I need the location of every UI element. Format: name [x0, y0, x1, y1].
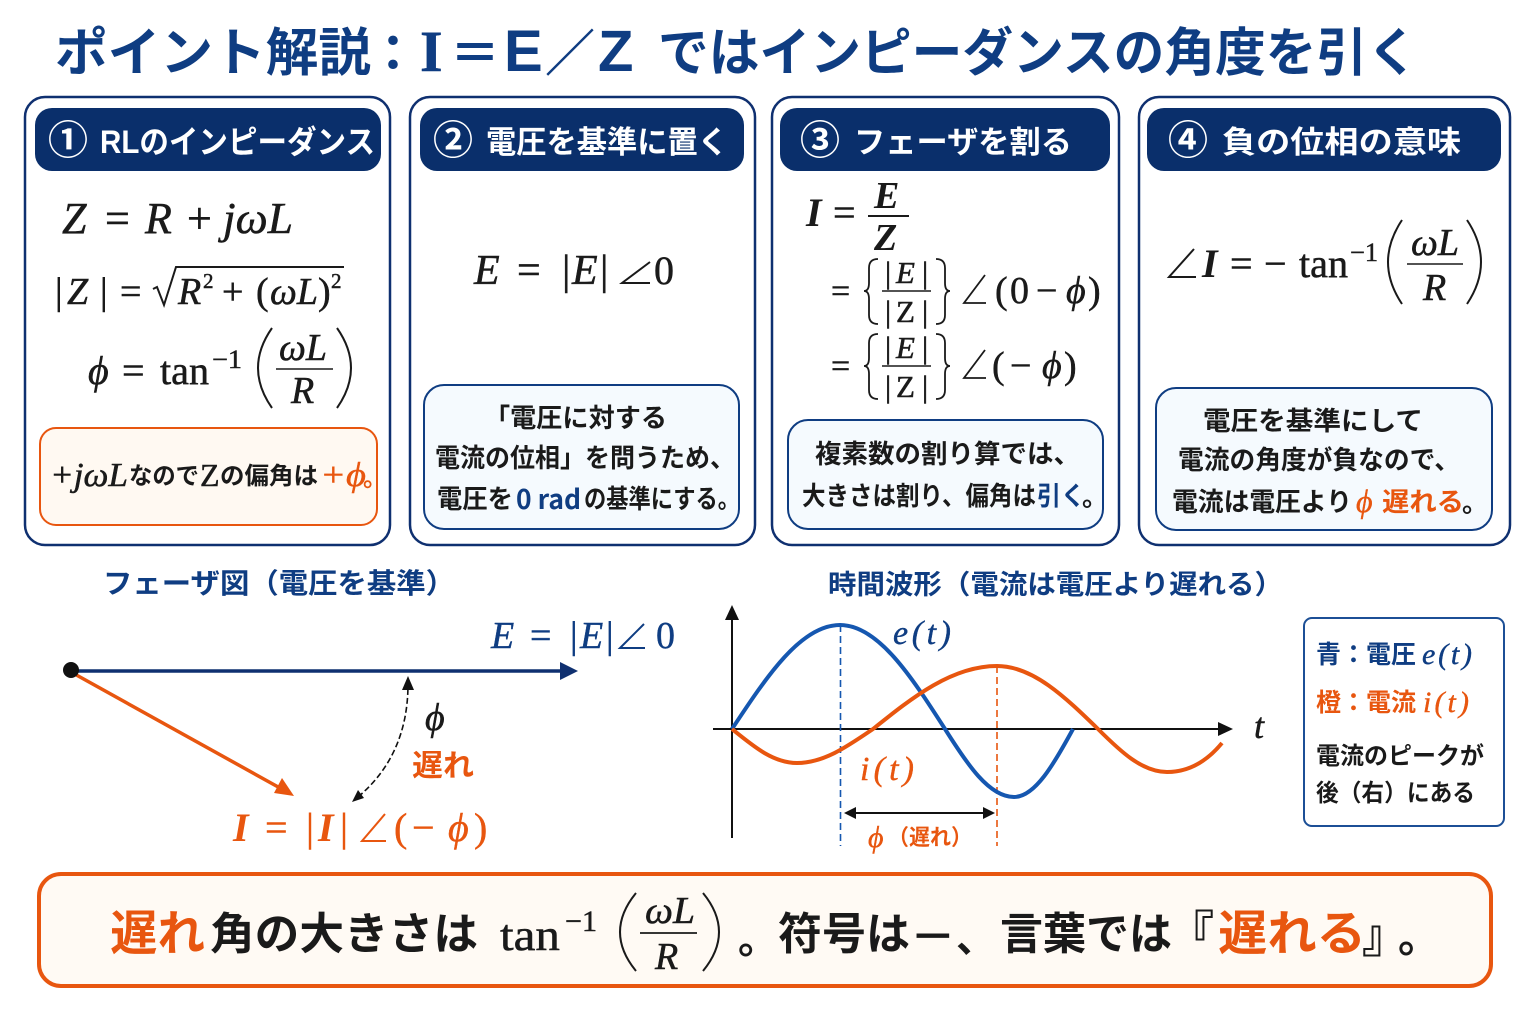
formula line 2: |	[922, 255, 928, 290]
negative phase formula: −	[1264, 241, 1287, 286]
formula line 2: |	[885, 255, 891, 290]
formula line 2: =	[831, 273, 850, 310]
callout: positive angle: 。	[363, 465, 387, 492]
title	[55, 11, 1418, 86]
callout: current lags: 。	[1462, 488, 1488, 518]
voltage phasor label: 0	[656, 615, 675, 657]
phasor diagram	[63, 568, 675, 850]
formula line 2: E	[895, 255, 915, 290]
magnitude formula: (	[256, 271, 269, 313]
impedance formula	[62, 194, 293, 243]
bottom summary banner: 』	[1362, 910, 1408, 962]
panel: 電圧を基準に置く	[410, 97, 755, 545]
title: ／	[545, 14, 595, 86]
callout: voltage reference	[424, 385, 740, 529]
callout: complex division: 大きさは割り、偏角は	[802, 481, 1036, 511]
callout: current lags	[1156, 388, 1492, 530]
panel 1 heading	[35, 108, 381, 171]
bottom summary banner: −	[914, 914, 952, 958]
formula line 2: )	[1088, 270, 1101, 312]
callout: voltage reference: 0 rad	[516, 478, 581, 517]
title: ではインピーダンスの角度を引く	[658, 11, 1418, 86]
legend note: 後（右）にある	[1316, 780, 1475, 807]
current phasor label: |	[306, 805, 314, 850]
panel: 負の位相の意味	[1139, 97, 1510, 545]
callout: complex division: 複素数の割り算では、	[815, 439, 1080, 469]
phasor heading: フェーザ図（電圧を基準）	[103, 568, 455, 599]
legend: current: i(t)	[1423, 686, 1469, 719]
peak guide lines	[840, 625, 997, 846]
callout: current lags: 電流の角度が負なので、	[1178, 445, 1460, 475]
magnitude formula: Z	[67, 271, 89, 313]
current fraction formula: =	[833, 190, 856, 235]
panel 2 heading	[420, 108, 744, 171]
panel 1 heading: RLのインピーダンス	[100, 124, 375, 160]
phase angle formula: −1	[212, 345, 242, 374]
lag arc arrow	[352, 676, 414, 802]
voltage label: e(t)	[893, 615, 951, 652]
voltage formula: |	[600, 248, 608, 294]
callout: current lags: 遅れる	[1382, 487, 1464, 517]
negative phase formula: R	[1422, 267, 1446, 309]
callout: complex division	[788, 420, 1108, 529]
voltage formula: |	[562, 248, 570, 294]
current phasor label: (	[394, 805, 407, 850]
title: ：	[368, 14, 418, 86]
bottom summary banner: ωL	[645, 890, 695, 932]
callout: voltage reference: 電流の位相」を問うため、	[435, 443, 735, 473]
panel 3 heading: フェーザを割る	[854, 125, 1072, 160]
panel 2 heading: ②	[433, 108, 473, 166]
voltage formula: E	[571, 248, 598, 294]
magnitude formula: |	[100, 271, 108, 313]
magnitude formula	[55, 267, 344, 313]
legend: voltage: 青：電圧	[1316, 641, 1416, 669]
panel 3 heading	[780, 108, 1110, 171]
voltage curve	[732, 625, 1073, 797]
impedance formula: R	[144, 194, 172, 243]
phase angle formula	[88, 327, 351, 412]
formula line 3: |	[885, 369, 891, 404]
phase angle formula: tan	[160, 348, 209, 393]
bottom summary banner: 言葉では	[1000, 910, 1172, 959]
magnitude formula: +	[222, 271, 243, 313]
bottom summary banner: 。	[1398, 914, 1440, 961]
magnitude formula: =	[120, 271, 141, 313]
impedance formula: +	[187, 194, 212, 243]
formula line 3: Z	[896, 369, 915, 404]
title: ポイント解説	[55, 11, 371, 86]
impedance formula: jωL	[218, 194, 293, 243]
panel 1 heading: ①	[48, 108, 88, 166]
callout: positive angle: +ϕ	[320, 457, 366, 494]
phase angle formula: ϕ	[88, 348, 109, 393]
current phasor label: I	[317, 805, 335, 850]
formula line 2: |	[885, 294, 891, 329]
title: ＝	[450, 14, 500, 86]
formula line 3: ϕ	[1042, 345, 1062, 387]
panel 3 heading: ③	[800, 108, 840, 166]
callout: voltage reference: 「電圧に対する	[484, 403, 667, 433]
formula line 3: )	[1064, 345, 1077, 387]
callout: complex division: 。	[1082, 482, 1108, 512]
callout: positive angle	[40, 428, 387, 525]
legend	[1304, 618, 1504, 826]
formula line 2: Z	[896, 294, 915, 329]
panel 4 heading	[1147, 108, 1501, 171]
panel 4 heading: ④	[1168, 108, 1208, 166]
title: Z	[598, 19, 633, 84]
formula line 2: 0	[1010, 270, 1029, 312]
negative phase formula	[1169, 220, 1481, 309]
formula line 2	[831, 255, 1101, 329]
bottom summary banner: R	[654, 936, 678, 978]
legend: current	[1316, 686, 1469, 719]
waveform chart	[713, 570, 1283, 854]
current fraction formula	[805, 175, 909, 259]
phase angle formula: =	[122, 348, 145, 393]
current phasor label	[232, 805, 487, 850]
negative phase formula: I	[1201, 241, 1219, 286]
current phasor label: −	[412, 805, 435, 850]
magnitude formula: 2	[203, 269, 214, 293]
axes: t	[1254, 706, 1265, 746]
title: E	[504, 19, 543, 84]
bottom summary banner: −1	[565, 905, 597, 938]
callout: current lags: ϕ	[1356, 483, 1373, 519]
voltage phasor label: E	[579, 615, 603, 657]
callout: complex division: 引く	[1037, 481, 1085, 511]
bottom summary banner: 。	[738, 918, 778, 962]
formula line 2: ϕ	[1066, 270, 1086, 312]
negative phase formula: =	[1230, 241, 1253, 286]
panel 2 heading: 電圧を基準に置く	[486, 125, 728, 160]
bottom summary banner: 遅れる	[1218, 908, 1366, 961]
callout: positive angle: Z	[200, 457, 220, 493]
voltage phasor label: |	[606, 615, 614, 657]
phi label: ϕ	[425, 697, 445, 739]
panel 4 heading: 負の位相の意味	[1222, 125, 1461, 160]
voltage phasor label: |	[570, 615, 578, 657]
formula line 2: |	[922, 294, 928, 329]
current phasor arrow	[71, 672, 294, 796]
bottom summary banner: tan	[500, 911, 560, 960]
bottom summary banner: 『	[1168, 907, 1214, 959]
impedance formula: Z	[62, 194, 87, 243]
legend note	[1316, 742, 1484, 807]
lag span label: ϕ	[868, 821, 884, 854]
callout: positive angle: なので	[129, 463, 199, 490]
legend: current: 橙：電流	[1316, 689, 1416, 717]
voltage formula: =	[517, 248, 541, 294]
panel: フェーザを割る	[772, 97, 1119, 545]
magnitude formula: 2	[331, 269, 342, 293]
current curve	[732, 666, 1222, 772]
current label: i(t)	[860, 751, 914, 788]
lag span label	[868, 821, 972, 854]
voltage formula: E	[473, 248, 500, 294]
formula line 2: −	[1036, 270, 1057, 312]
callout: positive angle: の偏角は	[220, 463, 318, 490]
legend: voltage: e(t)	[1422, 638, 1472, 671]
voltage phasor label: =	[530, 615, 551, 657]
phase angle formula: ωL	[279, 327, 327, 369]
bottom summary banner: 遅れ	[110, 908, 205, 961]
current phasor label: )	[474, 805, 487, 850]
axes	[713, 605, 1265, 838]
callout: voltage reference: の基準にする。	[584, 484, 740, 514]
lag label: 遅れ	[412, 750, 474, 783]
voltage phasor label	[490, 615, 675, 657]
lag span arrow	[844, 807, 995, 819]
bottom summary banner: 符号は	[778, 910, 910, 959]
magnitude formula: |	[55, 271, 63, 313]
lag span label: （遅れ）	[888, 825, 972, 850]
formula line 3: E	[895, 330, 915, 365]
current phasor label: =	[265, 805, 288, 850]
callout: voltage reference: 電圧を	[437, 484, 513, 514]
current phasor label: I	[232, 805, 250, 850]
formula line 3: |	[885, 330, 891, 365]
impedance formula: =	[105, 194, 130, 243]
voltage formula	[473, 248, 674, 294]
legend note: 電流のピークが	[1316, 742, 1484, 770]
magnitude formula: ωL	[270, 271, 318, 313]
voltage phasor label: E	[490, 615, 514, 657]
panel: RLのインピーダンス	[25, 97, 390, 545]
waveform heading: 時間波形（電流は電圧より遅れる）	[828, 570, 1283, 600]
phase angle formula: R	[290, 370, 314, 412]
current phasor label: |	[340, 805, 348, 850]
negative phase formula: −1	[1350, 238, 1378, 267]
legend: voltage	[1316, 638, 1472, 671]
callout: current lags: 電圧を基準にして	[1203, 406, 1423, 436]
formula line 2: (	[995, 270, 1008, 312]
negative phase formula: tan	[1299, 241, 1348, 286]
bottom summary banner: 角の大きさは	[210, 910, 478, 959]
bottom summary banner	[39, 874, 1491, 986]
title: I	[420, 19, 443, 84]
voltage formula: 0	[654, 248, 674, 293]
current fraction formula: I	[805, 190, 823, 235]
callout: positive angle: +jωL	[50, 457, 128, 494]
formula line 3: |	[922, 330, 928, 365]
current fraction formula: Z	[873, 217, 897, 259]
magnitude formula: R	[177, 271, 201, 313]
voltage phasor arrow	[71, 662, 578, 680]
negative phase formula: ωL	[1411, 222, 1459, 264]
formula line 3: (	[992, 345, 1005, 387]
formula line 3: −	[1010, 345, 1031, 387]
formula line 3: =	[831, 348, 850, 385]
origin dot	[63, 662, 79, 678]
bottom summary banner: 、	[956, 917, 996, 961]
formula line 3	[831, 330, 1077, 404]
current phasor label: ϕ	[448, 805, 469, 850]
callout: current lags: 電流は電圧より	[1172, 487, 1352, 517]
magnitude formula: )	[318, 271, 331, 313]
formula line 3: |	[922, 369, 928, 404]
current fraction formula: E	[873, 175, 899, 217]
